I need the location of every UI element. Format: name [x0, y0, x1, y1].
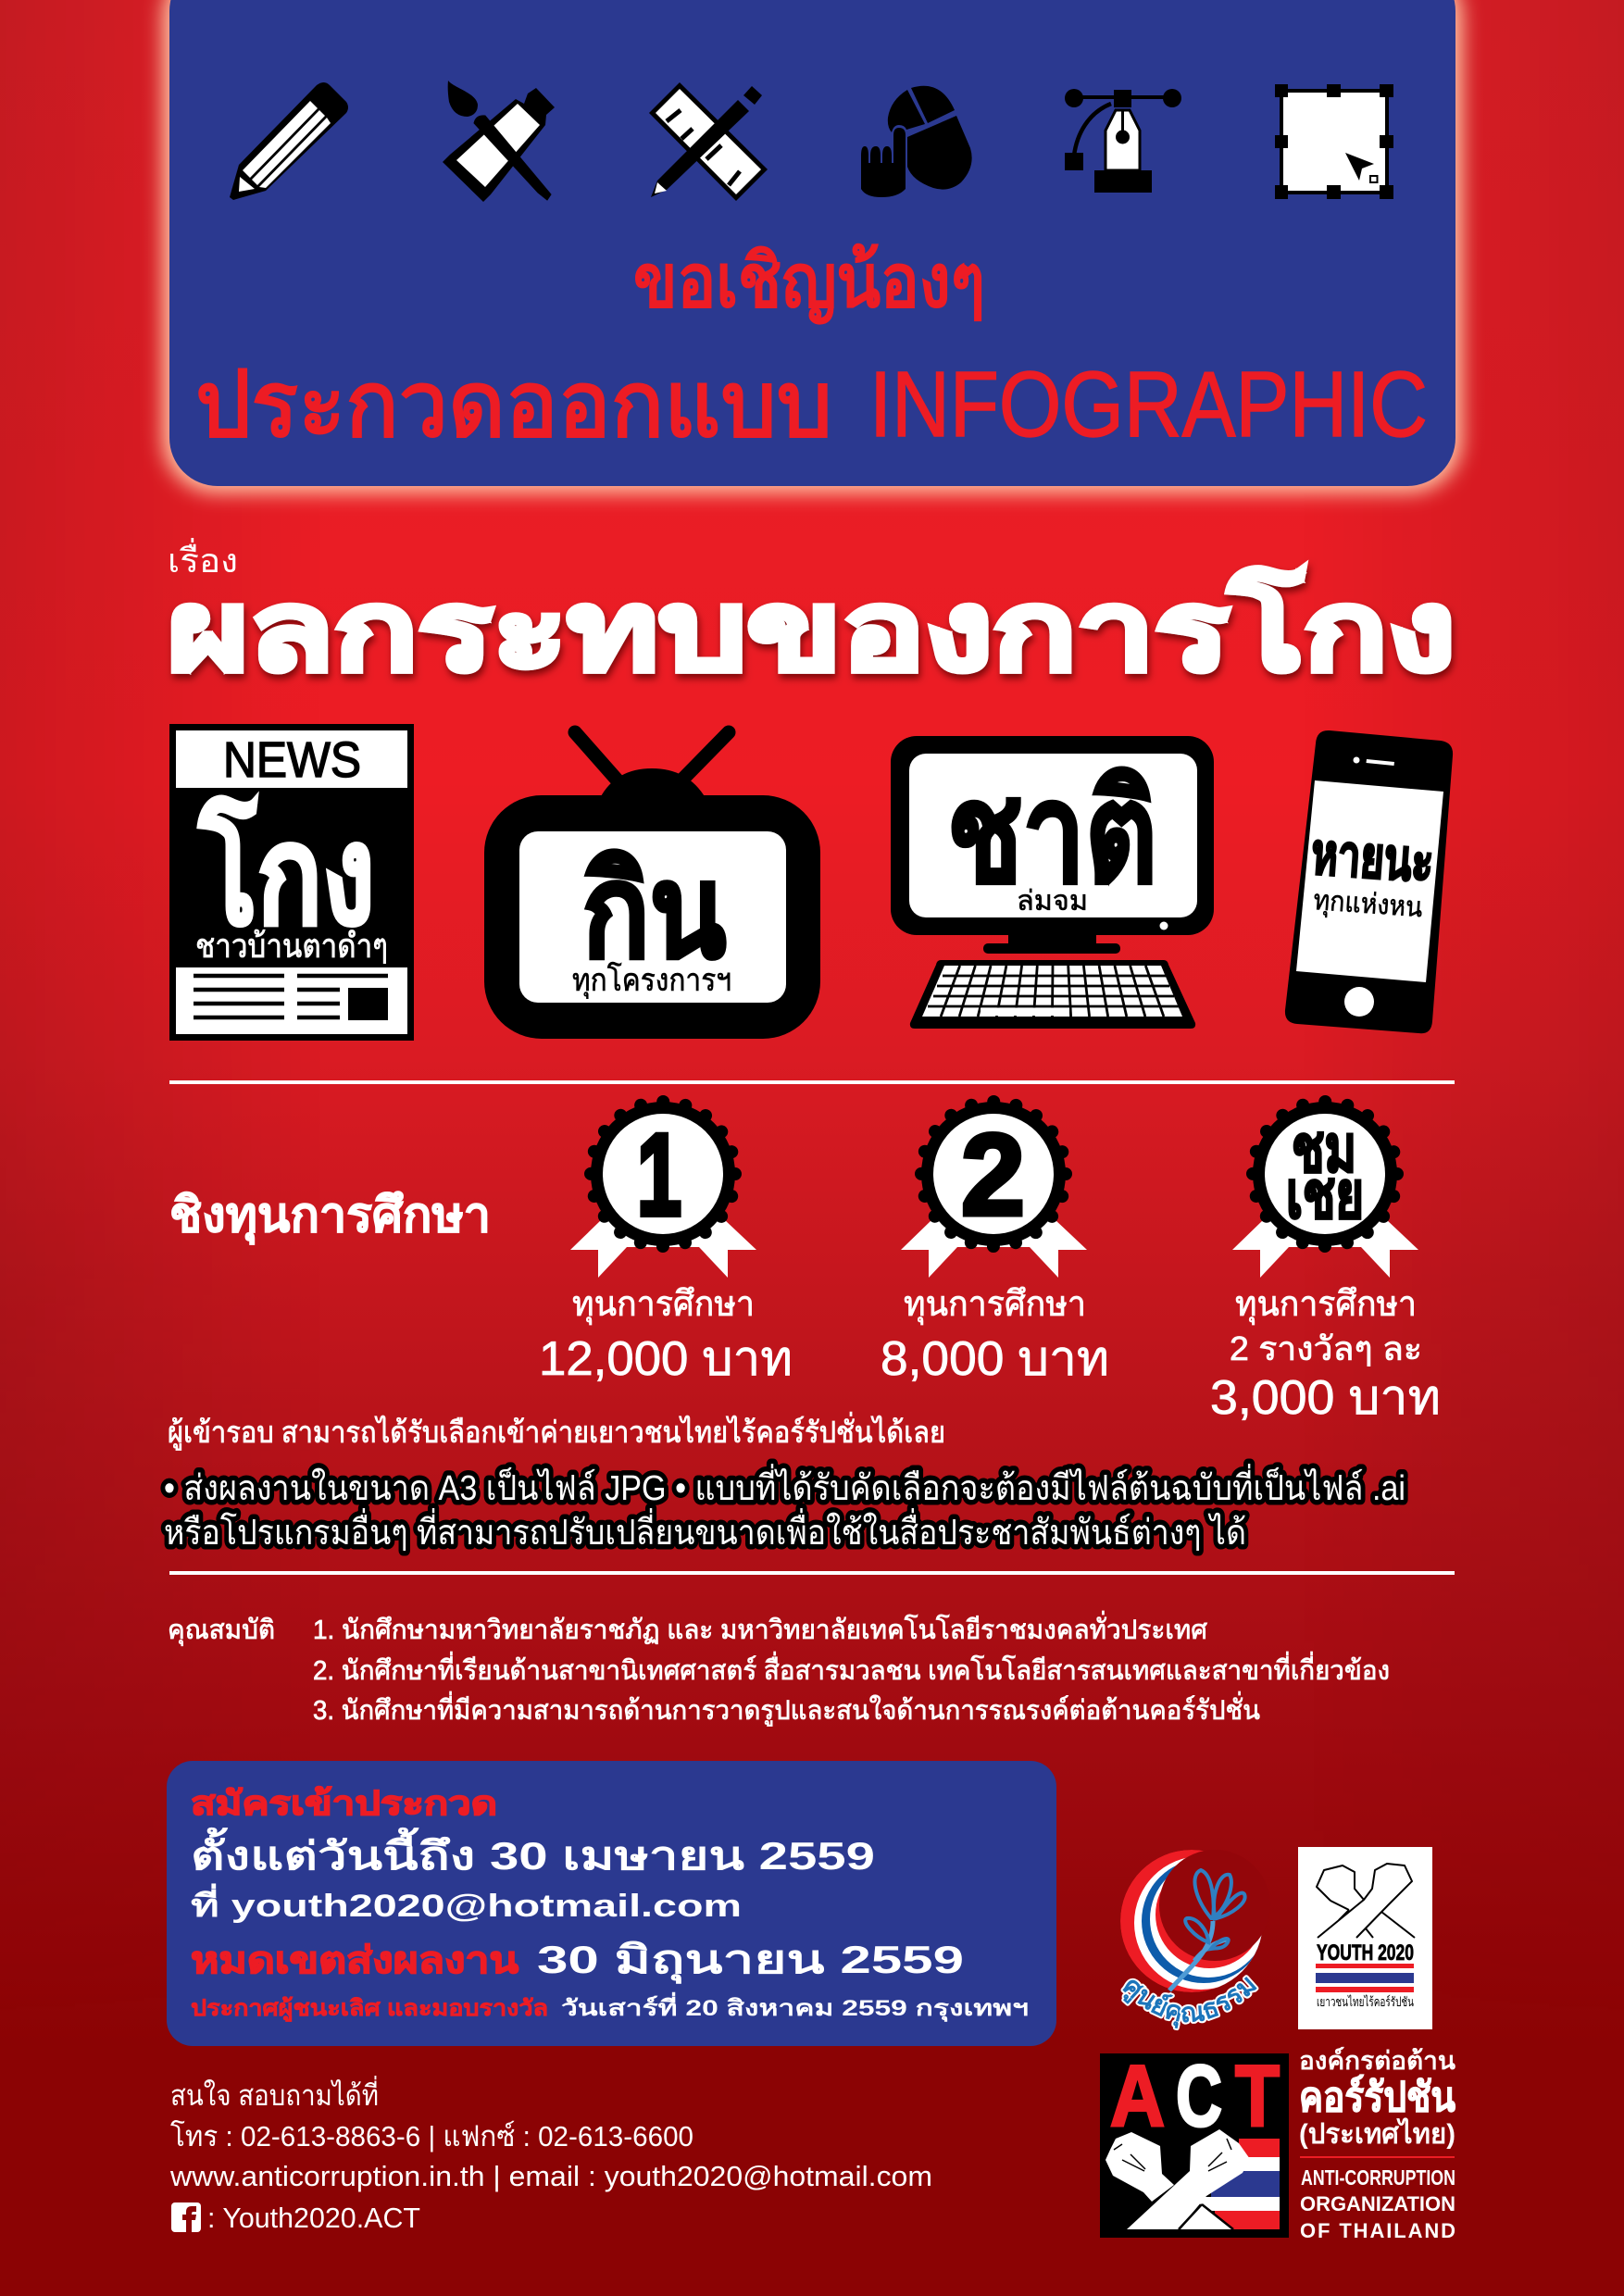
- newspaper headline: โกง: [197, 795, 375, 953]
- prize 3 label: ทุนการศึกษา: [1235, 1285, 1417, 1325]
- prize 2 amount: 8,000 บาท: [881, 1332, 1109, 1386]
- divider: [169, 1571, 1455, 1575]
- ACT letters: C: [1176, 2047, 1222, 2144]
- text block: contact: www.anticorruption.in.th | email : youth2020@hotmail.com: [169, 2160, 932, 2192]
- logo: ACT: [1100, 2047, 1289, 2238]
- text block: qualifications: 3. นักศึกษาที่มีความสามารถด้านการวาดรูปและสนใจด้านการรณรงค์ต่อต้านคอร์รัปชั่น: [313, 1691, 1260, 1727]
- newspaper subhead: ชาวบ้านตาดำๆ: [195, 927, 388, 965]
- text block: qualifications: 1. นักศึกษามหาวิทยาลัยราชภัฏ และ มหาวิทยาลัยเทคโนโลยีราชมงคลทั่วประเทศ: [313, 1611, 1208, 1645]
- ACT letters: [1110, 2047, 1280, 2144]
- prize 1 label: ทุนการศึกษา: [572, 1285, 755, 1325]
- text block: qualifications: คุณสมบัติ: [168, 1616, 275, 1646]
- ribbon medal 1: [570, 1102, 756, 1278]
- icon: television: [484, 732, 820, 1039]
- text block: submission rules: • ส่งผลงานในขนาด A3 เป็นไฟล์ JPG • แบบที่ได้รับคัดเลือกจะต้องมีไฟล์ต้นฉบับที่เป็นไฟล์ .ai: [164, 1464, 1405, 1508]
- phone headline: หายนะ: [1309, 822, 1436, 894]
- computer subhead: ล่มจม: [1017, 886, 1088, 917]
- label: topic: เรื่อง: [168, 538, 238, 580]
- icon: pen tool: [1065, 89, 1181, 193]
- text block: contact: สนใจ สอบถามได้ที่: [170, 2076, 379, 2112]
- prize: honorable mention: [1210, 1102, 1441, 1425]
- tv headline: กิน: [582, 839, 726, 984]
- heading: scholarship: ชิงทุนการศึกษา: [169, 1189, 491, 1245]
- prize 1 amount: 12,000 บาท: [539, 1332, 793, 1386]
- text block: submission rules: [164, 1464, 1405, 1553]
- ribbon medal 3: [1232, 1102, 1418, 1278]
- announcement: ประกาศผู้ชนะเลิศ และมอบรางวัล: [191, 1996, 548, 2022]
- deadline: หมดเขตส่งผลงาน: [191, 1940, 518, 1981]
- title: impact of corruption: ผลกระทบของการโกง: [168, 567, 1455, 693]
- icon: pencil: [230, 82, 348, 200]
- logo: youth 2020: [1298, 1847, 1432, 2029]
- icon: selection box with cursor: [1275, 84, 1393, 199]
- text block: ACT name: คอร์รัปชัน: [1299, 2074, 1455, 2120]
- heading: contest title: [195, 353, 1428, 456]
- prize 2 label: ทุนการศึกษา: [904, 1285, 1086, 1325]
- text block: submission rules: หรือโปรแกรมอื่นๆ ที่สามารถปรับเปลี่ยนขนาดเพื่อใช้ในสื่อประชาสัมพันธ์ต่างๆ ได้: [164, 1508, 1246, 1553]
- text block: ACT name: ANTI-CORRUPTION: [1301, 2165, 1455, 2190]
- ribbon medal 2: [901, 1102, 1087, 1278]
- text block: contact: โทร : 02-613-8863-6 | แฟกซ์ : 02-613-6600: [170, 2120, 693, 2152]
- announcement: วันเสาร์ที่ 20 สิงหาคม 2559 กรุงเทพฯ: [561, 1991, 1029, 2023]
- deadline: 30 มิถุนายน 2559: [537, 1938, 964, 1984]
- apply heading: สมัครเข้าประกวด: [191, 1784, 497, 1822]
- ACT letters: T: [1235, 2047, 1280, 2144]
- text block: qualifications: [168, 1611, 1390, 1727]
- note: finalists: ผู้เข้ารอบ สามารถได้รับเลือกเข้าค่ายเยาวชนไทยไร้คอร์รัปชั่นได้เลย: [168, 1412, 945, 1451]
- text block: ACT name: [1299, 2046, 1456, 2242]
- icon: smartphone: [1285, 730, 1453, 1033]
- prize: first: [539, 1102, 793, 1386]
- icon: newspaper: [169, 724, 414, 1041]
- tv subhead: ทุกโครงการฯ: [572, 962, 731, 999]
- medal text: ชม: [1292, 1113, 1356, 1185]
- prize: second: [881, 1102, 1109, 1386]
- medal number 1: 1: [637, 1111, 681, 1240]
- text block: qualifications: 2. นักศึกษาที่เรียนด้านสาขานิเทศศาสตร์ สื่อสารมวลชน เทคโนโลยีสารสนเทศและสาขาที่เกี่ยวข้อง: [313, 1652, 1390, 1686]
- heading: invite: ขอเชิญน้องๆ: [633, 240, 985, 323]
- panel: top header: [163, 0, 1462, 493]
- ACT letters: A: [1110, 2047, 1165, 2144]
- keyboard: [910, 960, 1195, 1029]
- phone subhead: ทุกแห่งหน: [1312, 885, 1424, 925]
- medal text: เชย: [1286, 1159, 1364, 1231]
- prize 3 count: 2 รางวัลๆ ละ: [1230, 1329, 1422, 1367]
- text block: ACT name: OF THAILAND: [1300, 2219, 1455, 2242]
- icon: hand on mouse: [861, 86, 972, 197]
- deadline: [191, 1938, 964, 1984]
- text block: contact: : Youth2020.ACT: [207, 2202, 420, 2234]
- divider: [169, 1080, 1455, 1084]
- medal number 2: 2: [961, 1111, 1025, 1240]
- newspaper columns: [176, 967, 407, 1034]
- text block: ACT name: องค์กรต่อต้าน: [1299, 2046, 1456, 2075]
- apply email: ที่ youth2020@hotmail.com: [191, 1883, 742, 1924]
- ACT flag: [1200, 2139, 1280, 2229]
- newspaper masthead: NEWS: [223, 732, 361, 788]
- text block: contact: [169, 2076, 932, 2234]
- icon: computer: [891, 736, 1214, 1029]
- logo: moral center: [1120, 1850, 1262, 2031]
- logo caption on arc: ศูนย์คุณธรรม: [1120, 1975, 1259, 2031]
- panel: dates: [167, 1761, 1056, 2046]
- youth caption: เยาวชนไทยไร้คอร์รัปชัน: [1317, 1994, 1414, 2009]
- apply period: ตั้งแต่วันนี้ถึง 30 เมษายน 2559: [191, 1827, 875, 1878]
- icon: brush and paint tube: [443, 81, 555, 202]
- ACT arms: [1106, 2129, 1250, 2229]
- icon: ruler and pencil: [649, 82, 768, 201]
- icon: facebook: [171, 2202, 201, 2232]
- text block: ACT name: (ประเทศไทย): [1299, 2117, 1455, 2150]
- prize 3 amount: 3,000 บาท: [1210, 1371, 1441, 1425]
- youth label: YOUTH 2020: [1317, 1940, 1414, 1965]
- heading: contest title: ประกวดออกแบบ: [195, 353, 832, 456]
- heading: contest title: INFOGRAPHIC: [869, 353, 1428, 456]
- text block: ACT name: ORGANIZATION: [1300, 2192, 1455, 2215]
- computer headline: ชาติ: [947, 755, 1157, 911]
- announcement: [191, 1991, 1029, 2023]
